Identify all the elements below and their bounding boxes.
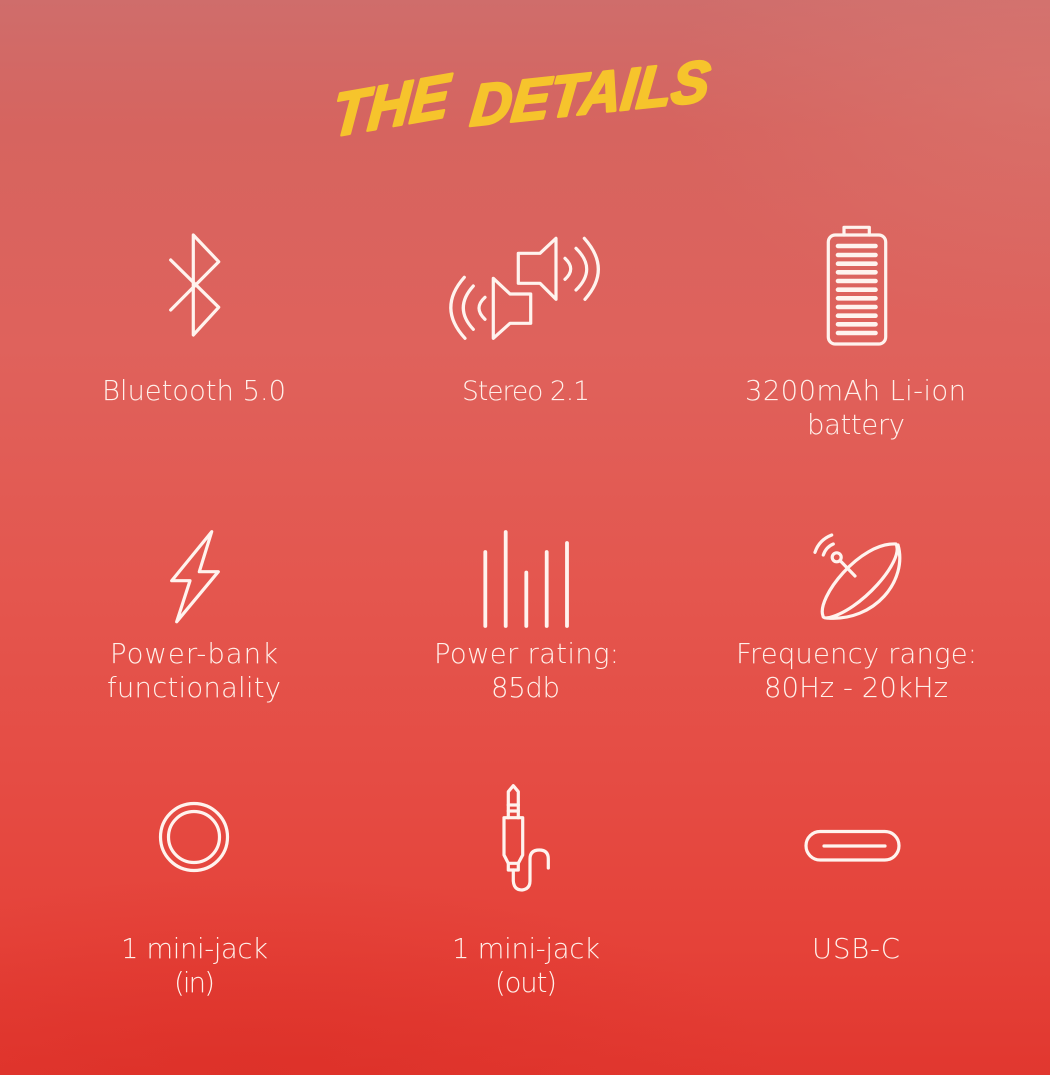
panel: frequency bbox=[736, 535, 986, 704]
icon: usb-c port bbox=[806, 832, 899, 860]
title: DETAILS bbox=[468, 49, 713, 139]
icon: jack plug bbox=[504, 786, 548, 890]
label: usb-c: USB-C bbox=[812, 933, 900, 965]
label: power bank: functionality bbox=[107, 672, 281, 704]
icon: satellite dish bbox=[815, 535, 900, 618]
title: THE bbox=[330, 60, 454, 150]
label: frequency: Frequency range: bbox=[736, 638, 977, 670]
icon: speakers bbox=[451, 238, 598, 338]
label: battery: 3200mAh Li-ion bbox=[745, 375, 966, 407]
panel: bluetooth bbox=[102, 235, 286, 407]
label: power bank: Power-bank bbox=[110, 638, 278, 670]
panel: stereo bbox=[451, 238, 598, 407]
label: frequency: 80Hz - 20kHz bbox=[764, 672, 948, 704]
panel: power rating bbox=[434, 532, 628, 704]
title bbox=[330, 49, 713, 150]
label: power rating: 85db bbox=[491, 672, 560, 704]
panel: battery bbox=[745, 227, 975, 441]
label: mini-jack in: (in) bbox=[174, 967, 215, 999]
icon: lightning bolt bbox=[172, 532, 218, 622]
label: mini-jack out: (out) bbox=[495, 967, 557, 999]
icon: bluetooth bbox=[171, 235, 219, 335]
label: bluetooth: Bluetooth 5.0 bbox=[102, 375, 286, 407]
label: power rating: Power rating: bbox=[434, 638, 619, 670]
panel: mini-jack out bbox=[452, 786, 608, 999]
panel: mini-jack in bbox=[121, 804, 276, 999]
icon: level bars bbox=[485, 532, 567, 626]
label: stereo: Stereo 2.1 bbox=[462, 376, 590, 407]
icon: battery bbox=[828, 227, 886, 344]
label: mini-jack in: 1 mini-jack bbox=[121, 933, 268, 965]
panel: power bank bbox=[107, 532, 288, 704]
icon: jack socket bbox=[160, 804, 228, 870]
label: battery: battery bbox=[807, 409, 905, 441]
label: mini-jack out: 1 mini-jack bbox=[452, 933, 600, 965]
panel: usb-c bbox=[806, 832, 900, 965]
